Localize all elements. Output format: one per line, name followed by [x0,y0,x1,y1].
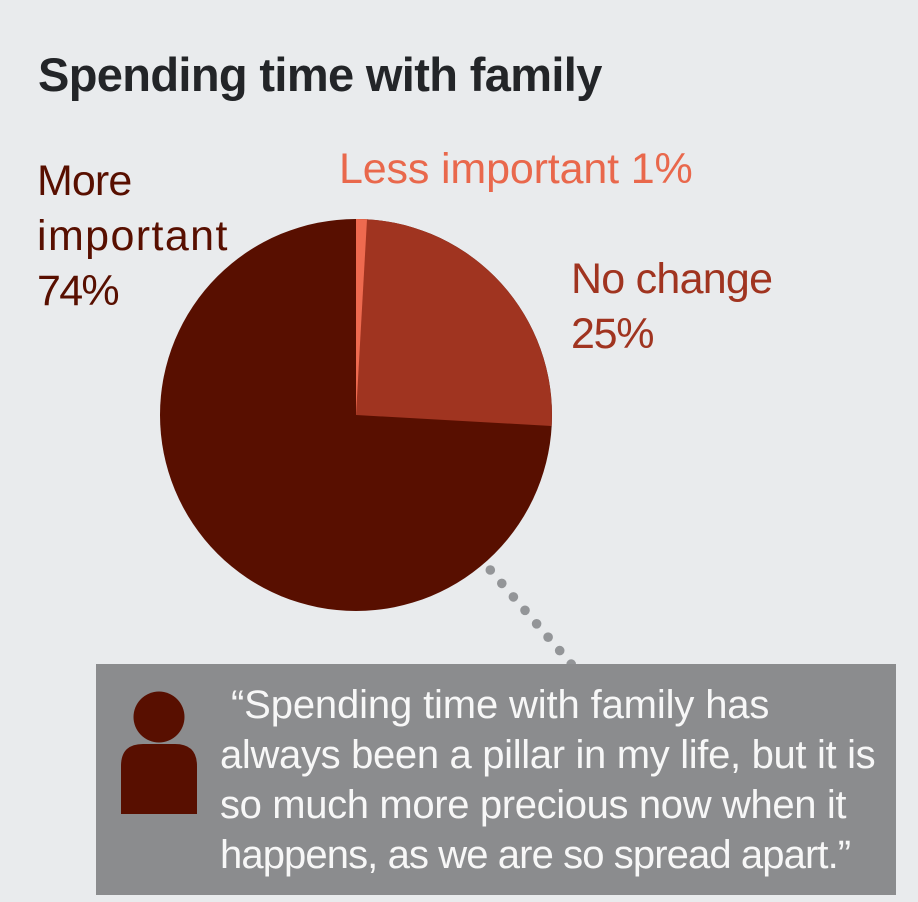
title: Spending time with family [38,48,602,101]
label: more important [37,157,229,315]
icon: person [121,692,197,814]
quote text: always been a pillar in my life, but it is [220,733,875,777]
label: no change: No change [571,255,772,303]
quote text [220,683,875,877]
label: more important: 74% [37,267,118,315]
label: more important: important [37,212,229,260]
quote text: so much more precious now when it [220,783,846,827]
label: less important: Less important 1% [339,145,693,193]
quote text: happens, as we are so spread apart.” [220,833,850,877]
label: more important: More [37,157,131,205]
callout [96,664,896,895]
dotted connector [486,565,576,664]
label: no change: 25% [571,310,653,358]
quote text: “Spending time with family has [231,683,769,727]
label: no change [571,255,772,358]
